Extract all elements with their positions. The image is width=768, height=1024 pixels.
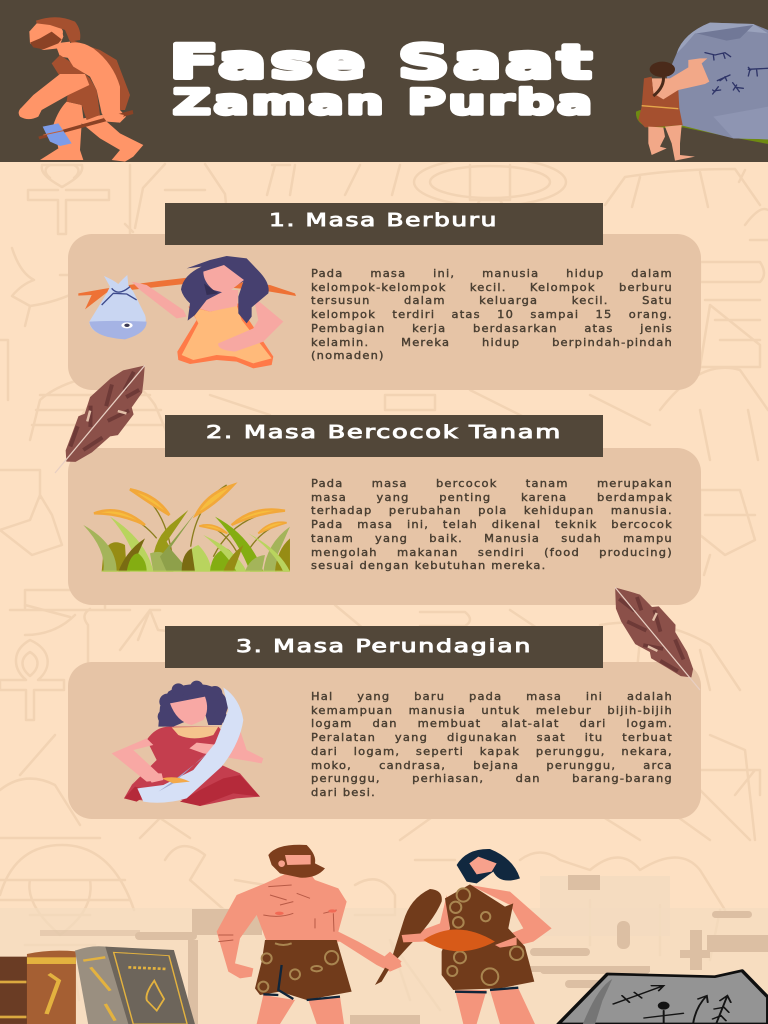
title: Fase Saat (170, 35, 596, 89)
heading: 1. Masa Berburu (165, 203, 603, 245)
text: masa berburu: (nomaden) (311, 350, 385, 362)
panel: masa perundagian (68, 662, 701, 819)
text: masa bercocok tanam: Pada masa ini, telah dikenal teknik bercocok (311, 519, 673, 531)
heading: 2. Masa Bercocok Tanam (165, 415, 603, 457)
icon: feather left (37, 352, 164, 488)
text: masa bercocok tanam: terhadap perubahan pola kehidupan manusia. (311, 505, 673, 517)
text: masa bercocok tanam (311, 478, 673, 572)
title (170, 35, 596, 123)
text: masa berburu: kelompok terdiri atas 10 sampai 15 orang. (311, 309, 673, 321)
text: masa bercocok tanam: tanam yang baik. Manusia sudah mampu (311, 533, 673, 545)
icon: stack of books (0, 946, 195, 1024)
header band (0, 0, 768, 162)
text: masa bercocok tanam: Pada masa bercocok tanam merupakan (311, 478, 673, 490)
panel: masa berburu (68, 234, 701, 390)
icon: woman with bundle (78, 256, 296, 368)
text: masa berburu: tersusun dalam keluarga kecil. Satu (311, 295, 673, 307)
text: masa bercocok tanam: mengolah makanan sendiri (food producing) (311, 547, 673, 559)
text: masa berburu: Pembagian kerja berdasarkan atas jenis (311, 323, 673, 335)
text: masa bercocok tanam: masa yang penting karena berdampak (311, 492, 673, 504)
panel: masa bercocok tanam (68, 448, 701, 605)
text: masa berburu: Pada masa ini, manusia hidup dalam (311, 268, 673, 280)
title: Zaman Purba (173, 83, 595, 123)
icon: cave painter and rock (636, 23, 768, 161)
text: masa perundagian: logam dan membuat alat-alat dari logam. (311, 718, 673, 730)
icon: woman in red dress (112, 681, 263, 806)
text: masa perundagian: perunggu, perhiasan, dan barang-barang (311, 773, 673, 785)
icon: walking caveman (19, 17, 143, 162)
icon: stone with carvings (558, 971, 768, 1024)
icon: cavewoman with club and meat (375, 849, 552, 1024)
text: masa perundagian: Peralatan yang digunakan saat itu terbuat (311, 732, 673, 744)
text: masa bercocok tanam: sesuai dengan kebutuhan mereka. (311, 560, 546, 572)
icon: caveman with club (217, 845, 402, 1024)
text: masa berburu: kelamin. Mereka hidup berpindah-pindah (311, 337, 673, 349)
text: masa perundagian: dari besi. (311, 787, 376, 799)
text: masa perundagian: moko, candrasa, bejana perunggu, arca (311, 760, 673, 772)
text: masa perundagian (311, 691, 673, 799)
icon: feather right (600, 572, 716, 704)
heading: 1. Masa Berburu: 1. Masa Berburu (269, 210, 498, 231)
text: masa perundagian: dari logam, seperti kapak perunggu, nekara, (311, 746, 673, 758)
text: masa perundagian: kemampuan manusia untuk melebur bijih-bijih (311, 705, 673, 717)
lower faded blocks (0, 876, 768, 1024)
heading: 3. Masa Perundagian: 3. Masa Perundagian (236, 636, 532, 657)
icon: rice plants (83, 485, 290, 572)
text: masa berburu (311, 268, 673, 362)
text: masa perundagian: Hal yang baru pada masa ini adalah (311, 691, 673, 703)
heading: 2. Masa Bercocok Tanam: 2. Masa Bercocok Tanam (206, 422, 562, 443)
heading: 3. Masa Perundagian (165, 626, 603, 668)
text: masa berburu: kelompok-kelompok kecil. Kelompok berburu (311, 282, 673, 294)
